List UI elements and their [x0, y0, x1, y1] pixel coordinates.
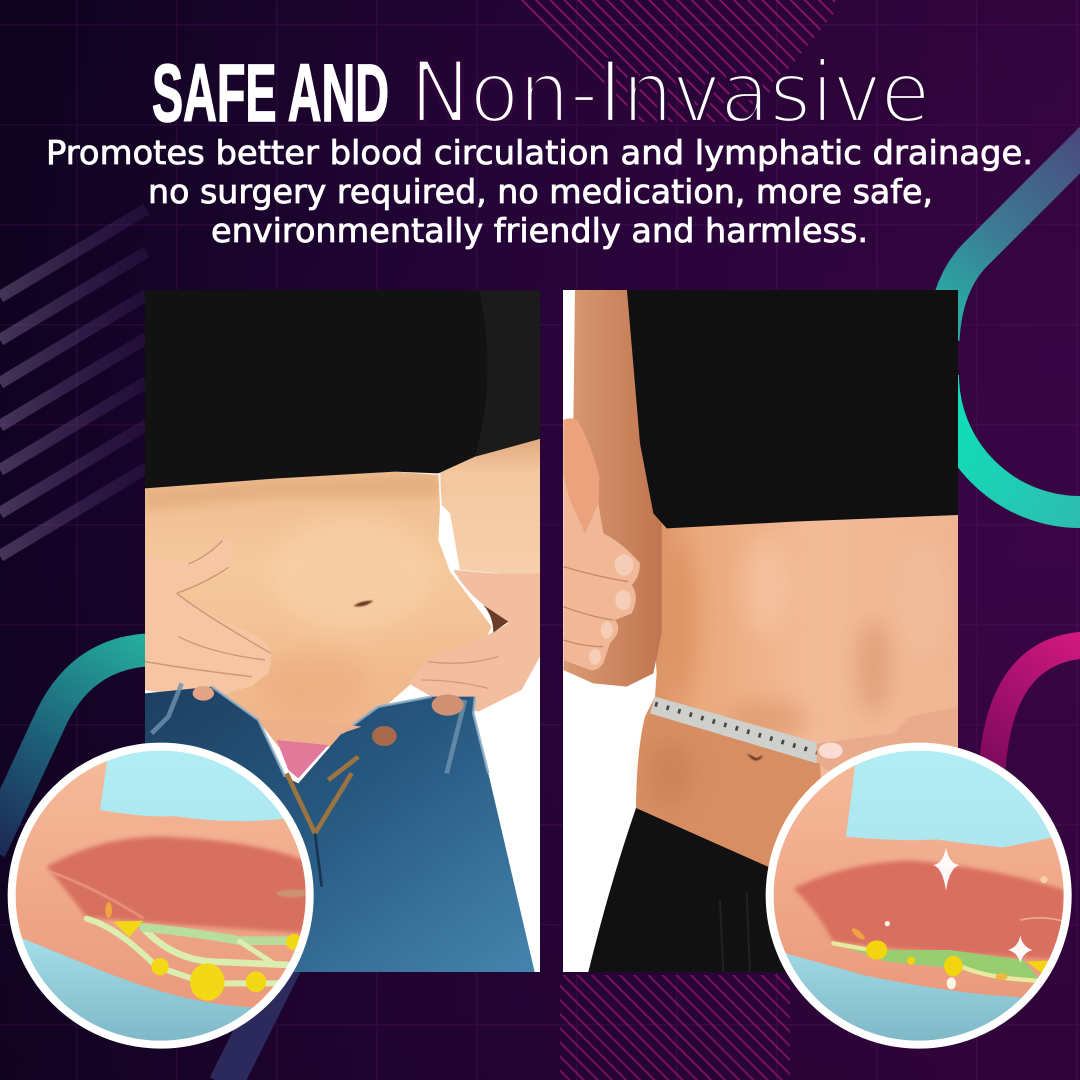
black top: [627, 287, 958, 528]
circle content: [16, 750, 306, 1041]
arm: [563, 290, 662, 687]
yellow nodes: [866, 940, 1049, 980]
lower belly: [636, 717, 821, 867]
ab shading: [672, 560, 700, 680]
fingernails: [589, 554, 633, 665]
subtitle text: Promotes better blood circulation and lymphatic drainage.: [46, 133, 1033, 172]
lymph vessels: [87, 919, 300, 983]
shirt shadow on skin: [145, 475, 438, 510]
hand outline shading: [145, 541, 271, 677]
right hand: [408, 570, 542, 712]
arm: [763, 740, 1073, 997]
sparkle small: [1008, 935, 1033, 963]
title bold part: SAFE AND: [152, 48, 389, 139]
zipper: [287, 757, 358, 833]
lymph vessels: [833, 943, 1040, 979]
seam: [315, 833, 322, 887]
belly bottom: [258, 720, 362, 745]
panel: after photo: [563, 287, 958, 973]
arm: [16, 761, 302, 1008]
top magenta stripes: [516, 0, 835, 122]
subtitle text: environmentally friendly and harmless.: [211, 211, 868, 250]
belly: [143, 472, 492, 747]
navel: [747, 753, 763, 760]
droplets: [885, 876, 1048, 989]
pinch shadow: [483, 605, 508, 633]
raised right arm: [440, 430, 542, 577]
sparkle large: [933, 847, 959, 891]
subtitle text: [46, 133, 1033, 250]
black pants: [588, 808, 790, 973]
panel: before photo: [143, 287, 542, 973]
measuring tape: [650, 697, 820, 763]
before circle: lymph illustration: [8, 742, 314, 1049]
torso: [636, 515, 958, 810]
finger lines: [563, 567, 628, 647]
thumbs-up hand: [563, 418, 640, 670]
white ring: [12, 747, 310, 1045]
title: [152, 43, 930, 143]
black shirt: [145, 287, 542, 488]
pink underwear: [277, 740, 328, 778]
muscle: [47, 837, 308, 933]
title thin part: Non-Invasive: [410, 43, 930, 143]
left hand: [145, 540, 271, 700]
left grey diagonal stripes: [0, 209, 146, 556]
top-right teal arc: [943, 135, 1080, 512]
navel: [353, 601, 373, 607]
right pink arc: [992, 645, 1080, 770]
white ring: [770, 747, 1068, 1045]
muscle: [793, 861, 1065, 960]
circle content: [750, 730, 1080, 1060]
fingernail: [819, 743, 843, 759]
bottom magenta stripes: [560, 975, 790, 1080]
yellow lymph nodes: [113, 921, 302, 1001]
bottom diagonal band: [225, 965, 285, 1080]
hand holding tape: [817, 707, 958, 773]
after circle: lymph illustration: [750, 730, 1080, 1060]
thumb nail: [432, 694, 464, 716]
button: [372, 726, 397, 746]
jeans: [145, 687, 535, 973]
subtitle text: no surgery required, no medication, more safe,: [148, 172, 933, 211]
left teal arc: [0, 650, 146, 850]
waistband highlights: [212, 687, 488, 777]
belly shading: [290, 521, 414, 626]
